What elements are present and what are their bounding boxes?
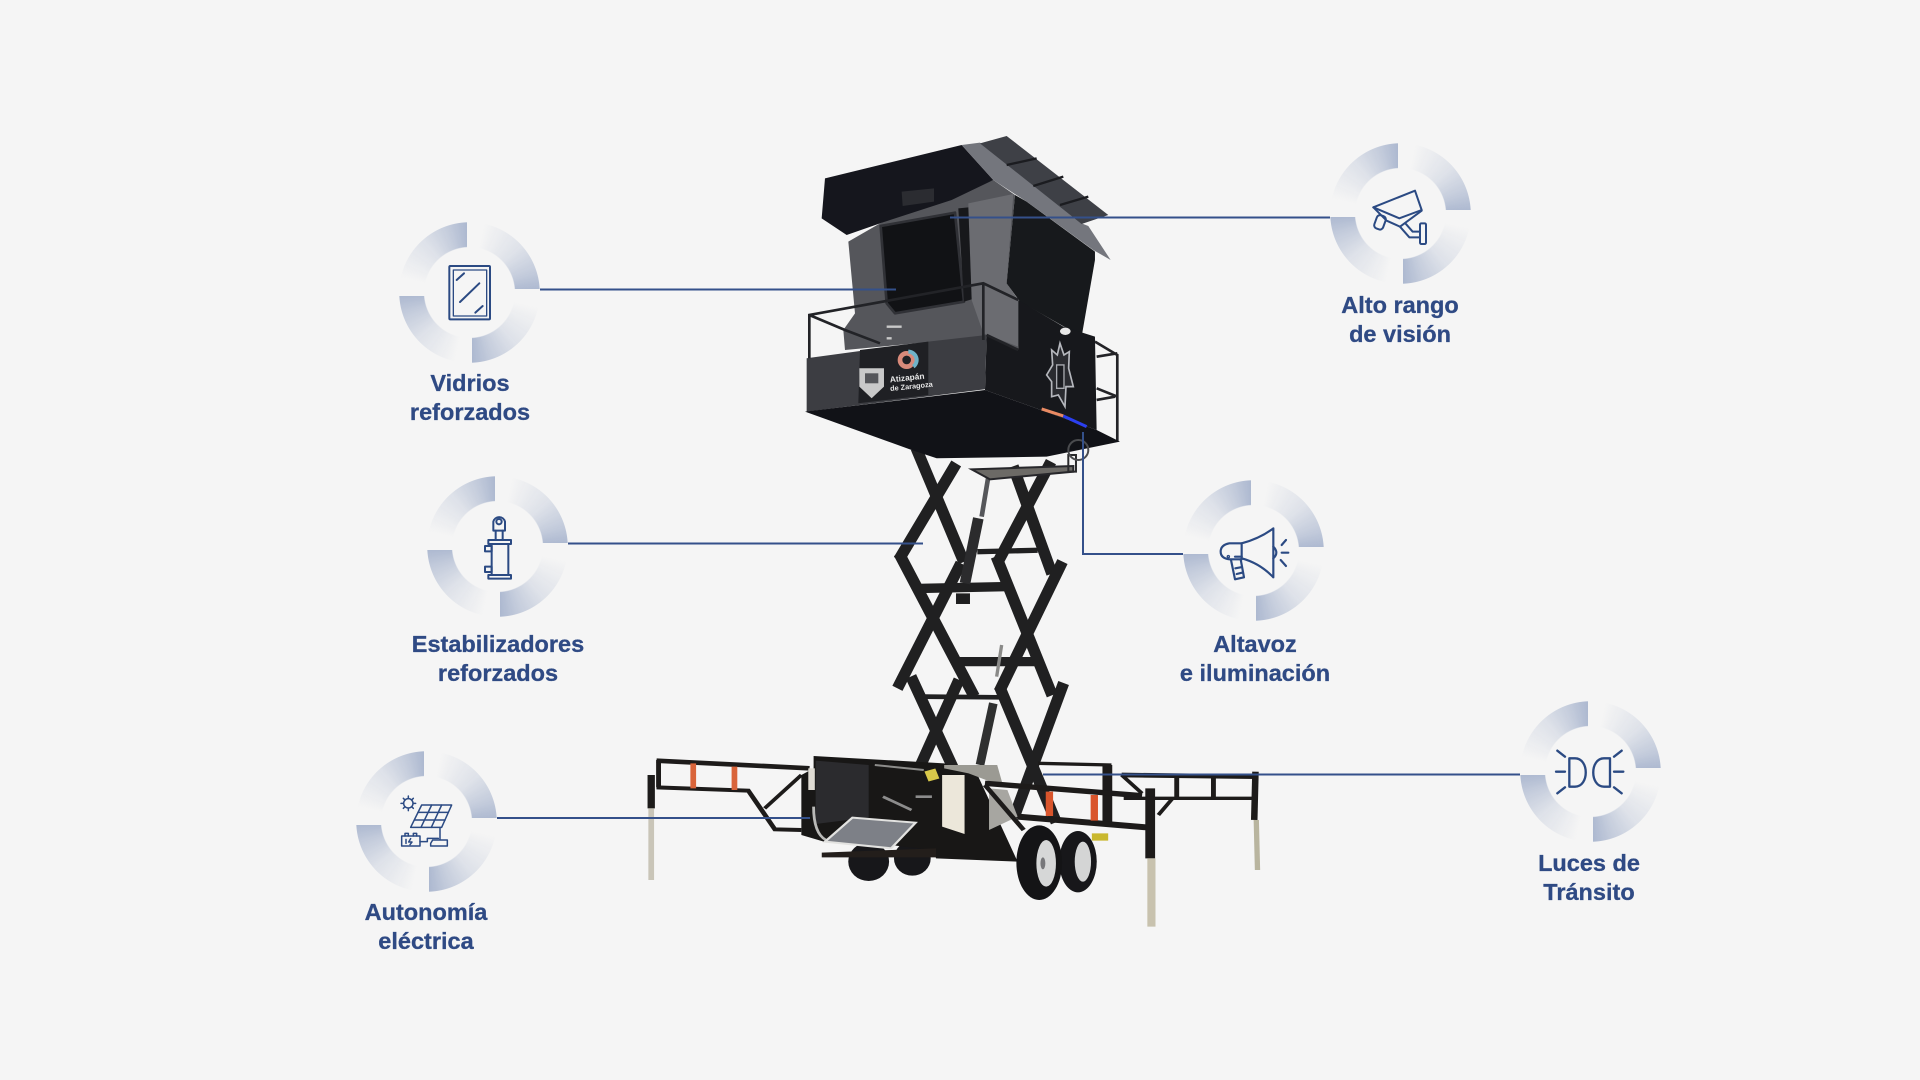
callout: Estabilizadores reforzados [412,476,584,686]
label: Estabilizadores [412,631,584,657]
front wheels [1059,831,1097,892]
city name [889,370,934,393]
icon: reinforced glass [448,265,491,320]
callout: Luces de Tránsito [1520,701,1661,905]
ring [427,476,568,617]
left outrigger [651,760,810,830]
label [365,899,488,954]
deck base [805,390,1120,458]
label: reforzados [410,399,530,425]
city name: Atizapán [889,371,925,384]
label [1341,292,1459,347]
ring [356,750,497,892]
callout: Alto rango de visión [1330,143,1471,347]
callout: Altavoz e iluminación [1180,480,1330,686]
front railing [809,283,1018,358]
city logo [900,353,913,367]
line: Estabilizadores [568,542,923,544]
label: Alto rango [1341,292,1459,318]
door handle [887,327,902,338]
line: Luces [1043,774,1520,776]
roof underside [822,145,993,235]
label: reforzados [438,660,558,686]
label: Tránsito [1543,879,1635,905]
window [881,213,964,313]
callout: Vidrios reforzados [399,222,540,425]
callout: Autonomía eléctrica [356,751,497,954]
label: Vidrios [430,370,510,396]
icon: hydraulic cylinder [484,516,512,580]
lamp [1060,328,1071,335]
scissor lift [900,453,1076,817]
label: Altavoz [1213,631,1297,657]
icon: security camera [1372,190,1427,245]
label: e iluminación [1180,660,1330,686]
label: Autonomía [365,899,487,925]
back wheels [848,842,889,881]
solar panel [825,818,916,848]
line: Alto rango [950,216,1330,218]
ring [399,222,540,363]
line: Autonomía [497,817,810,819]
leader lines [497,218,1520,818]
roof fascia [962,143,1111,260]
icon: solar panel and battery [400,795,452,847]
police star [1047,343,1073,407]
ring [1520,701,1660,842]
deck front panel [807,335,987,412]
roof solar panels [980,136,1108,224]
label: de visión [1349,321,1451,347]
label [1538,850,1640,905]
glass side [1007,195,1095,337]
right railing [1095,342,1117,442]
label: eléctrica [378,928,474,954]
deck dark side [985,300,1097,430]
ring [1183,480,1324,621]
body wall [843,180,1018,368]
label [410,370,530,425]
label: Luces de [1538,850,1640,876]
central engine box [801,756,1018,862]
right rails [985,763,1256,858]
cabin [805,136,1120,460]
icon: traffic lights [1554,749,1624,795]
siren light [1042,409,1063,416]
line: Vidrios [540,288,896,290]
label [1180,631,1330,686]
label [412,631,584,686]
ring [1330,143,1470,284]
trailer [651,756,1258,927]
icon: megaphone [1220,527,1290,580]
line: Altavoz [1083,432,1183,554]
mount [1068,440,1088,460]
municipal shield [859,368,884,398]
city name: de Zaragoza [890,380,934,393]
